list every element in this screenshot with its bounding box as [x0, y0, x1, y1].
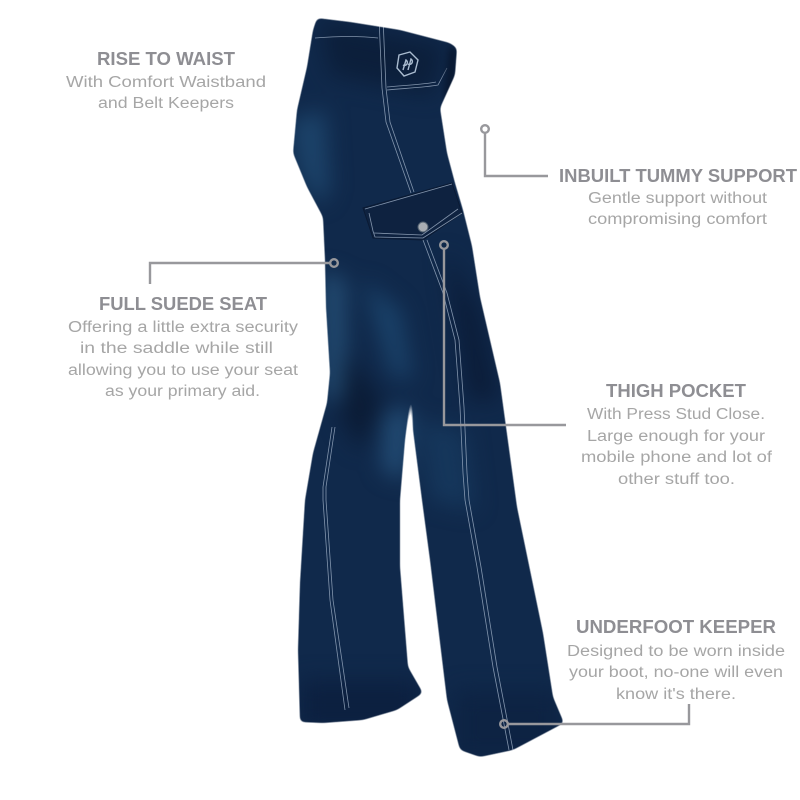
- text block: underfoot keeper: UNDERFOOT KEEPER: [576, 617, 776, 637]
- fly shadow: [444, 46, 457, 100]
- text block: thigh pocket: With Press Stud Close.: [587, 406, 765, 423]
- text block: rise to waist: RISE TO WAIST: [97, 49, 235, 69]
- text block: thigh pocket: [581, 381, 773, 488]
- text block: full suede seat: in the saddle while still: [80, 340, 273, 357]
- text block: underfoot keeper: [567, 617, 785, 703]
- text block: inbuilt tummy support: Gentle support without: [588, 190, 768, 207]
- text block: full suede seat: FULL SUEDE SEAT: [99, 294, 267, 314]
- pocket flap: [363, 183, 462, 240]
- panel: trousers photo: [292, 18, 563, 757]
- text block: rise to waist: With Comfort Waistband: [66, 74, 266, 91]
- text block: full suede seat: as your primary aid.: [105, 383, 260, 400]
- text block: rise to waist: [66, 49, 266, 112]
- stitching: [315, 18, 513, 750]
- text block: full suede seat: [68, 294, 299, 400]
- text block: thigh pocket: other stuff too.: [618, 471, 735, 488]
- text block: thigh pocket: THIGH POCKET: [606, 381, 746, 401]
- text block: full suede seat: allowing you to use your seat: [68, 362, 299, 379]
- connector: suede seat: [150, 259, 338, 284]
- icon: logo badge on hip: [397, 52, 418, 76]
- text block: thigh pocket: mobile phone and lot of: [581, 449, 773, 466]
- icon: press stud: [418, 222, 428, 232]
- text block: full suede seat: Offering a little extra security: [68, 319, 298, 336]
- text block: underfoot keeper: know it's there.: [616, 686, 736, 703]
- connector: thigh pocket: [440, 241, 566, 425]
- connector: underfoot keeper: [500, 704, 689, 728]
- text block: inbuilt tummy support: [559, 166, 797, 228]
- text block: thigh pocket: Large enough for your: [587, 428, 765, 445]
- text block: inbuilt tummy support: INBUILT TUMMY SUPPORT: [559, 166, 797, 186]
- connector: tummy support: [481, 125, 548, 176]
- text block: underfoot keeper: Designed to be worn inside: [567, 643, 785, 660]
- text block: inbuilt tummy support: compromising comfort: [588, 211, 768, 228]
- text block: rise to waist: and Belt Keepers: [98, 95, 234, 112]
- text block: underfoot keeper: your boot, no-one will even: [569, 664, 783, 681]
